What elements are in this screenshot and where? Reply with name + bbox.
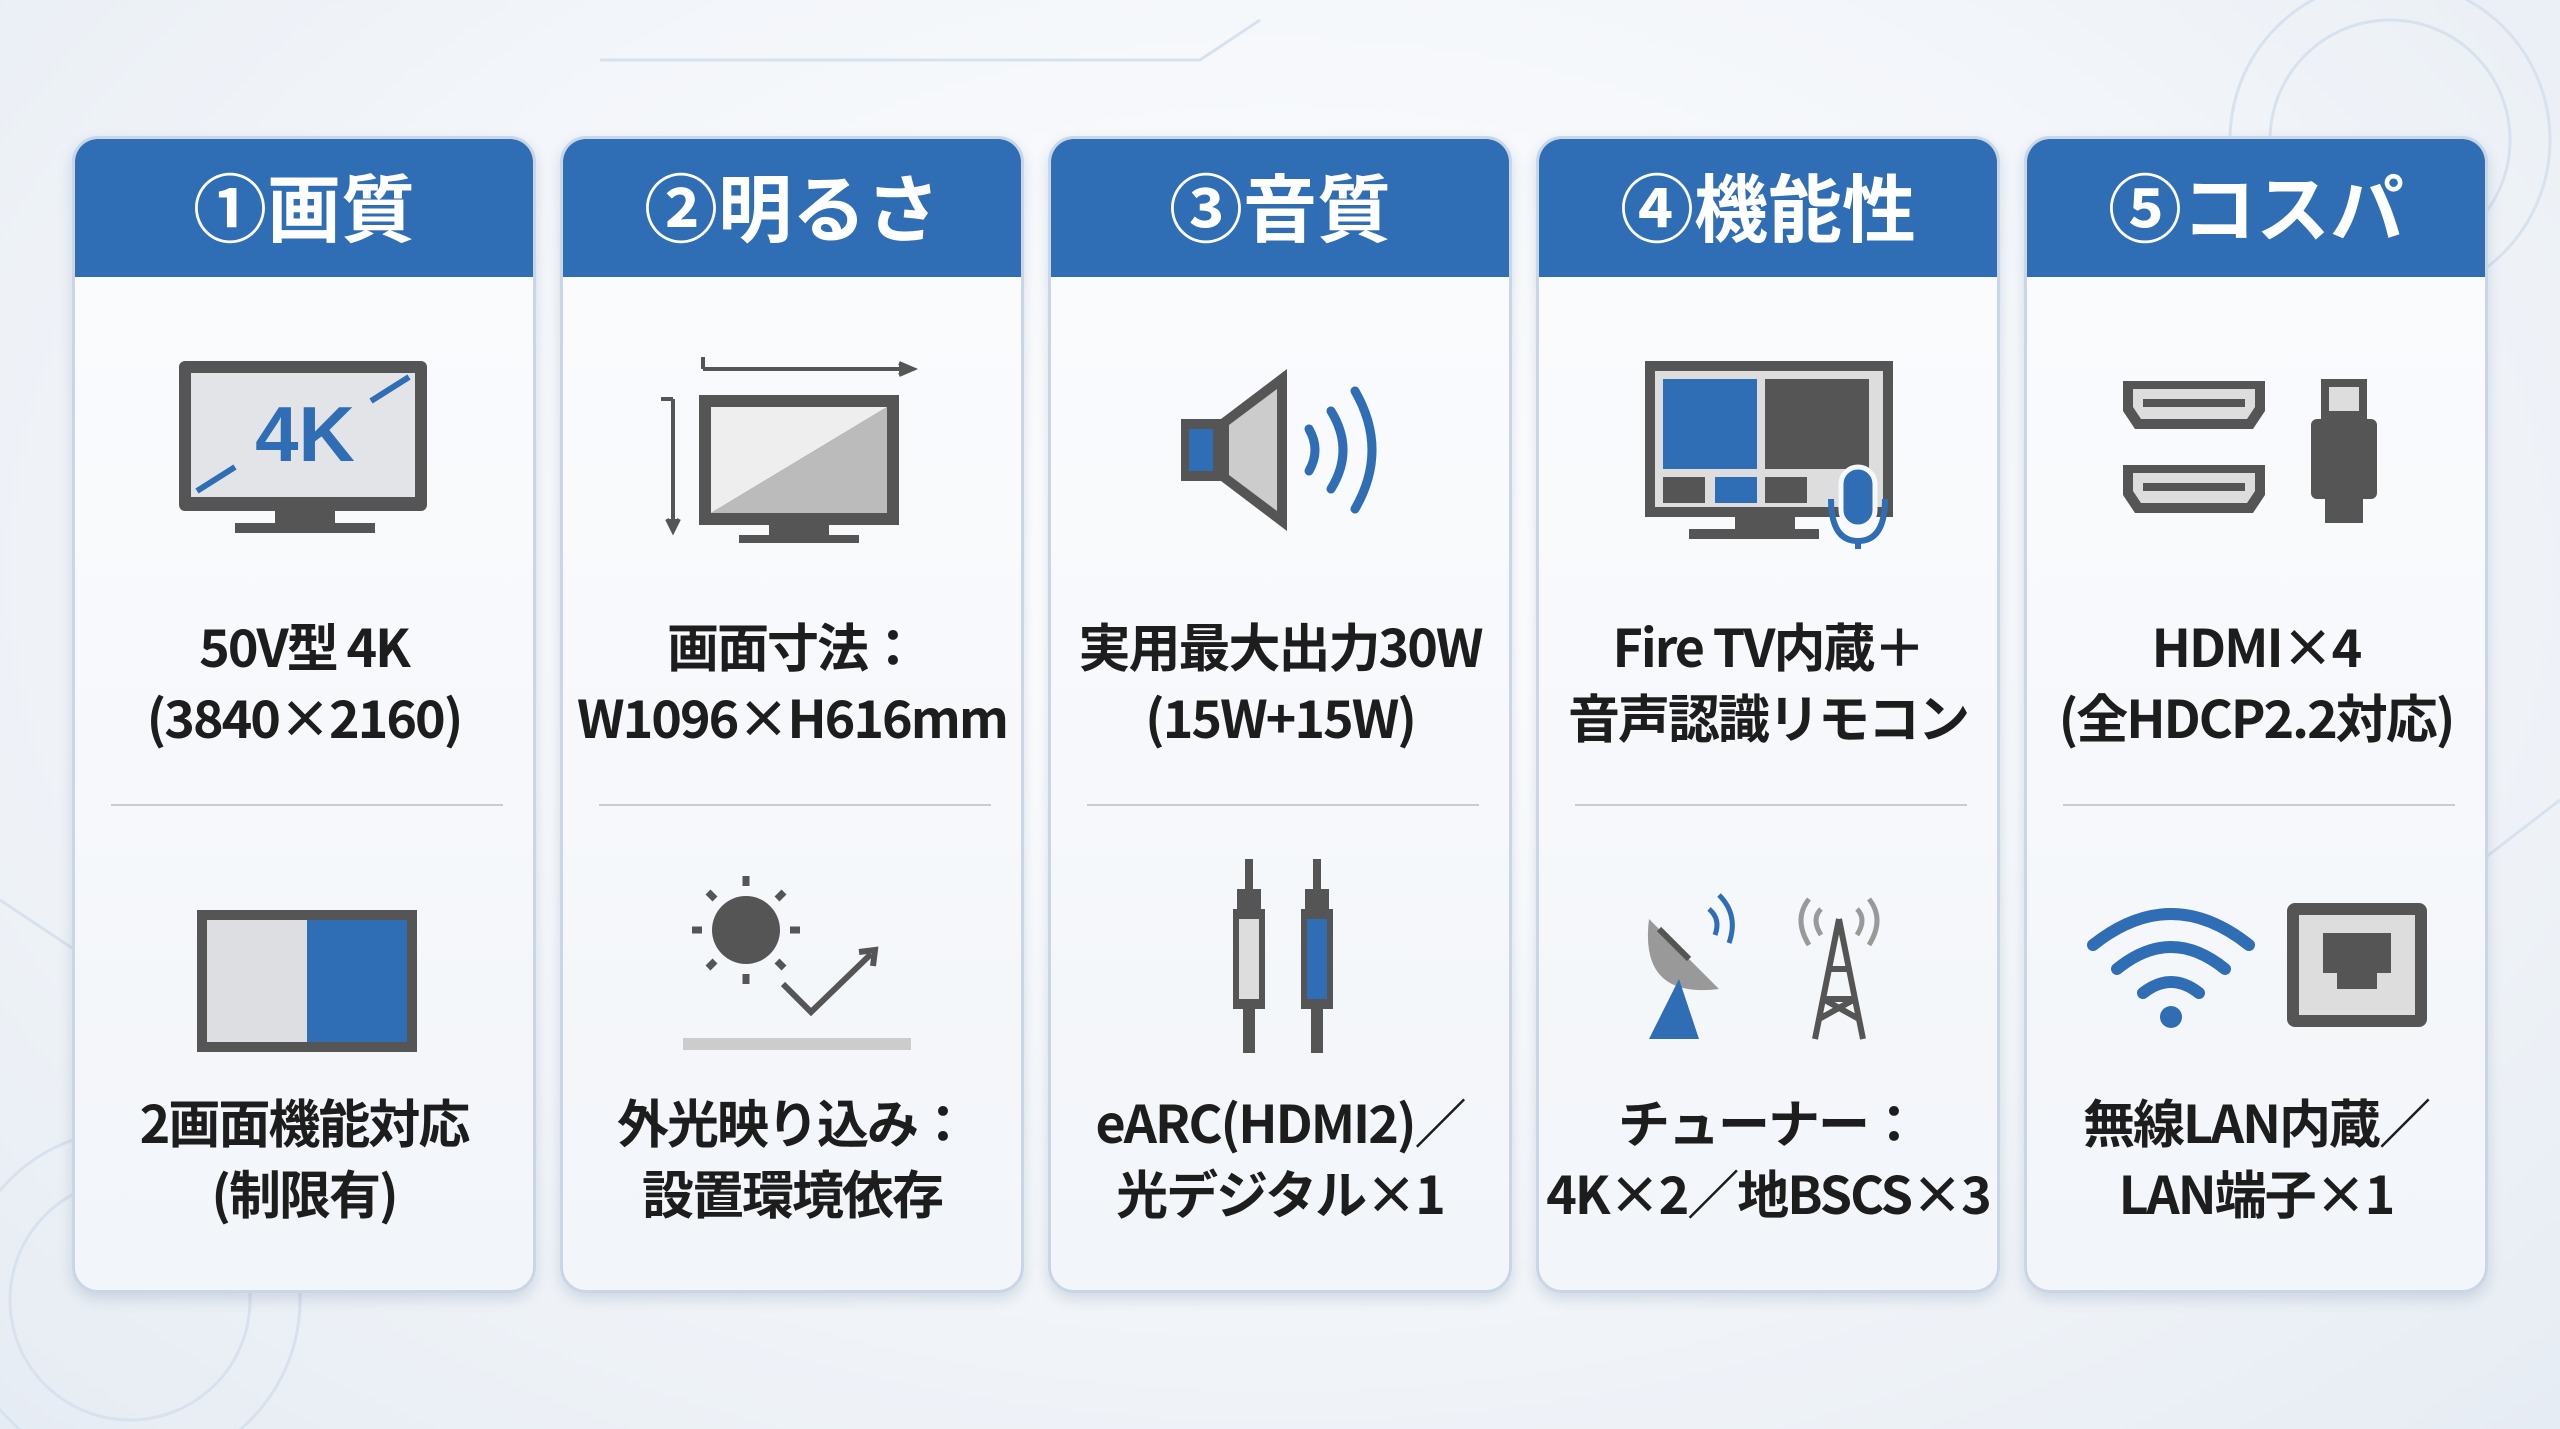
text: spec 1 (1079, 607, 1482, 753)
heading: ①画質 (193, 151, 415, 258)
text: spec 1 (147, 607, 461, 753)
panel: 音質 (1048, 136, 1512, 1293)
text: spec 2: 設置環境依存 (642, 1154, 942, 1229)
icon: wifi and LAN (2087, 903, 2427, 1028)
text: spec 1: (3840×2160) (147, 678, 461, 753)
text: spec 2: LAN端子×1 (2119, 1154, 2393, 1229)
heading (2027, 139, 2485, 277)
text: spec 2 (1095, 1083, 1465, 1229)
text: spec 1: 音声認識リモコン (1568, 678, 1968, 753)
text: spec 2 (2083, 1083, 2430, 1229)
heading: ②明るさ (644, 151, 940, 258)
icon: HDMI ports (2123, 379, 2377, 523)
heading (75, 139, 533, 277)
text: spec 2 (617, 1083, 967, 1229)
text: spec 2: (制限有) (211, 1154, 397, 1229)
panel: 機能性 (1536, 136, 2000, 1293)
text: spec 1: Fire TV内蔵＋ (1612, 607, 1923, 682)
panel: 明るさ (560, 136, 1024, 1293)
heading: ⑤コスパ (2108, 151, 2404, 258)
text: spec 1: 50V型 4K (199, 607, 409, 682)
icon: sun reflection (683, 876, 911, 1050)
icon: 4K TV (179, 361, 427, 533)
text: spec 1: HDMI×4 (2152, 607, 2360, 682)
panel: 画質 (72, 136, 536, 1293)
icon: screen dimensions (661, 357, 918, 543)
heading: ④機能性 (1620, 151, 1916, 258)
icon: split screen (197, 910, 417, 1052)
icon: RCA cables (1233, 859, 1333, 1053)
text: spec 2: 無線LAN内蔵／ (2083, 1083, 2429, 1158)
text: spec 2: 光デジタル×1 (1116, 1154, 1444, 1229)
text: spec 2: 2画面機能対応 (140, 1083, 468, 1158)
text: spec 2: eARC(HDMI2)／ (1095, 1083, 1465, 1158)
text: spec 1: (15W+15W) (1145, 678, 1415, 753)
icon: satellite dish and antenna (1648, 893, 1880, 1040)
text: spec 2: チューナー： (1618, 1083, 1918, 1158)
text: spec 1 (577, 607, 1007, 753)
heading (563, 139, 1021, 277)
text: spec 2: 4K×2／地BSCS×3 (1546, 1154, 1990, 1229)
icon: speaker (1181, 369, 1377, 531)
text: spec 1: (全HDCP2.2対応) (2059, 678, 2453, 753)
heading: ③音質 (1169, 151, 1391, 258)
icon: Fire TV with mic (1645, 361, 1893, 549)
text: spec 1 (1568, 607, 1968, 753)
text: spec 1: 画面寸法： (667, 607, 917, 682)
icon: 4K TV: 4K (255, 390, 355, 478)
text: spec 2 (1546, 1083, 1990, 1229)
panel: コスパ (2024, 136, 2488, 1293)
heading (1539, 139, 1997, 277)
text: spec 1 (2059, 607, 2453, 753)
text: spec 1: 実用最大出力30W (1079, 607, 1481, 682)
heading (1051, 139, 1509, 277)
text: spec 1: W1096×H616mm (577, 678, 1007, 753)
text: spec 2: 外光映り込み： (617, 1083, 967, 1158)
text: spec 2 (140, 1083, 470, 1229)
